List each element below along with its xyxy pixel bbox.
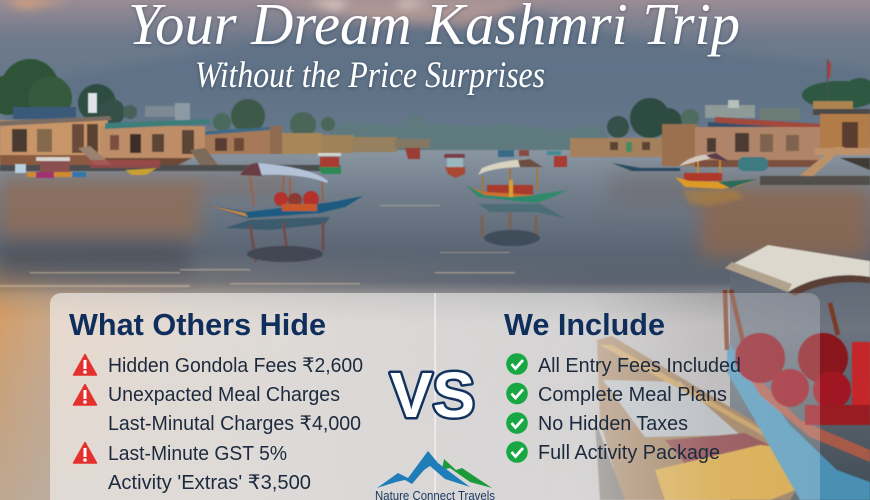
- dark water lower right: [730, 255, 870, 500]
- item: gondola fees: Hidden Gondola Fees ₹2,600: [108, 355, 363, 377]
- item: entry fees: All Entry Fees Included: [538, 355, 741, 377]
- VS badge: VS: [390, 359, 475, 431]
- icon: check 1: [506, 353, 528, 375]
- right column: we include: [504, 308, 741, 464]
- item: activity extras: Activity 'Extras' ₹3,500: [108, 472, 311, 494]
- icon: check 4: [506, 441, 528, 463]
- icon: blue mountain: [377, 451, 470, 488]
- icon: warning 1: [74, 354, 96, 375]
- item: meal plans: Complete Meal Plans: [538, 384, 727, 406]
- included list: [506, 353, 741, 464]
- boat 3: [675, 153, 758, 189]
- distant boats: [444, 148, 680, 178]
- center divider line: [434, 293, 436, 500]
- heading: we include: We Include: [504, 308, 665, 342]
- subtitle: Without the Price Surprises: [195, 55, 545, 96]
- item: last-minute charges: Last-Minutal Charges ₹4,000: [108, 413, 361, 435]
- icon: check 3: [506, 412, 528, 434]
- water ripples: [0, 205, 515, 287]
- icon: green mountain: [442, 459, 492, 488]
- foreground canopy: [725, 245, 870, 292]
- icon: warning 2: [74, 384, 96, 405]
- foreground tan boat: [595, 336, 815, 500]
- right trees: [607, 78, 870, 138]
- sky: [0, 0, 870, 150]
- sunset glow on water: [0, 258, 457, 500]
- icon: warning 3: [74, 442, 96, 463]
- heading: what others hide: What Others Hide: [69, 308, 326, 342]
- reflections: [0, 172, 870, 274]
- foreground shikara: [725, 245, 870, 500]
- boat 1 reflection: [225, 217, 330, 262]
- boat 3 reflection: [682, 190, 745, 206]
- water: [0, 148, 870, 500]
- icon: check 2: [506, 383, 528, 404]
- left column: what others hide: [69, 308, 363, 494]
- item: no hidden taxes: No Hidden Taxes: [538, 413, 688, 435]
- boat 2 reflection: [478, 204, 565, 246]
- far tree line: [330, 113, 610, 150]
- logo: Nature Connect Travels: [375, 451, 495, 500]
- right houseboats: [570, 58, 870, 185]
- hidden charges list: [74, 354, 363, 494]
- mountains: [0, 0, 870, 140]
- item: GST: Last-Minute GST 5%: [108, 443, 287, 465]
- left trees: [0, 59, 335, 138]
- translucent comparison panel: [50, 293, 820, 500]
- small left boats: [15, 148, 420, 178]
- boat 2: [467, 159, 568, 203]
- left houseboats: [0, 93, 430, 171]
- boat 1: [206, 163, 363, 218]
- item: meal charges: Unexpacted Meal Charges: [108, 384, 340, 406]
- item: activity package: Full Activity Package: [538, 442, 720, 464]
